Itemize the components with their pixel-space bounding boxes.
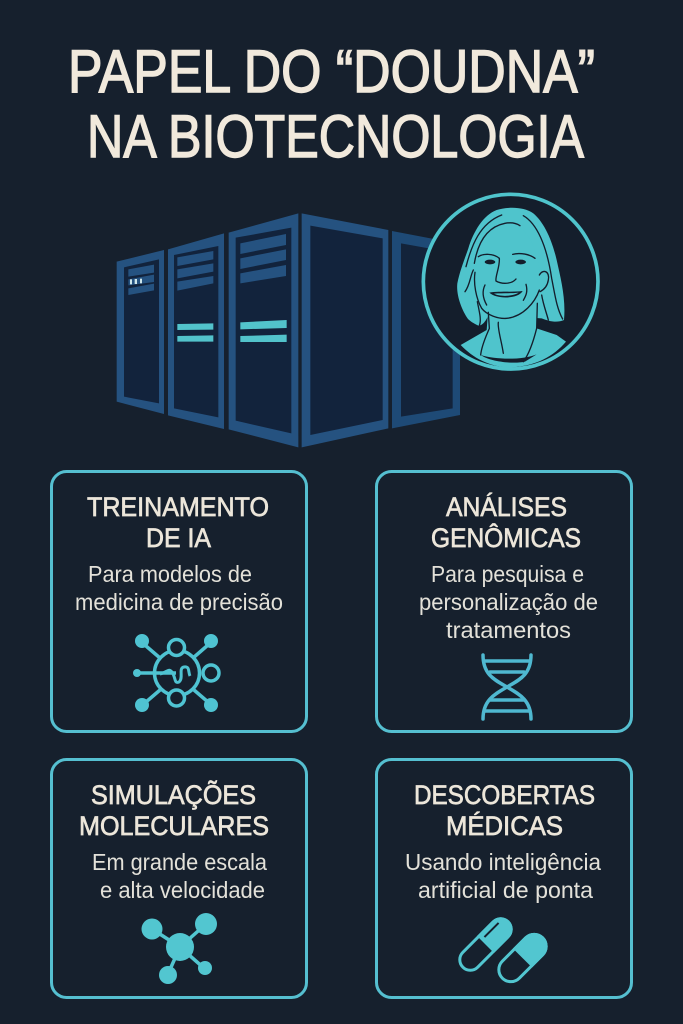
text block: Em grande escala <box>92 849 267 875</box>
heading <box>79 779 269 841</box>
icon: DNA helix <box>483 655 531 719</box>
text block: medicina de precisão <box>75 589 283 615</box>
heading <box>87 492 269 553</box>
hair <box>457 208 564 326</box>
icon: neural network <box>133 634 219 712</box>
text block <box>419 561 598 643</box>
heading <box>431 492 581 553</box>
text block <box>92 849 267 903</box>
heading: TREINAMENTO <box>87 492 269 522</box>
facial lines <box>465 215 563 362</box>
text block <box>75 561 283 615</box>
heading: DESCOBERTAS <box>414 780 595 810</box>
heading <box>414 780 595 841</box>
heading: SIMULAÇÕES <box>91 779 256 810</box>
panel: descobertas médicas <box>376 760 632 998</box>
text block <box>405 849 601 903</box>
text block: Para pesquisa e <box>431 561 584 587</box>
heading: GENÔMICAS <box>431 522 581 553</box>
text block: artificial de ponta <box>418 877 593 903</box>
text block: Usando inteligência <box>405 849 601 875</box>
heading: MÉDICAS <box>446 811 563 841</box>
title: NA BIOTECNOLOGIA <box>87 103 584 170</box>
icon: capsules <box>454 912 553 988</box>
illustration: server racks <box>117 213 460 447</box>
text block: e alta velocidade <box>100 877 265 903</box>
panel: análises genômicas <box>376 472 632 732</box>
icon: molecule <box>142 913 217 984</box>
portrait: Doudna <box>423 194 598 369</box>
text block: tratamentos <box>446 617 571 643</box>
text block: personalização de <box>419 589 598 615</box>
heading: MOLECULARES <box>79 811 269 841</box>
face <box>475 223 540 318</box>
text block: Para modelos de <box>88 561 252 587</box>
panel: treinamento de IA <box>52 472 306 732</box>
panel: simulações moleculares <box>52 760 306 998</box>
shoulders and neck <box>461 302 566 368</box>
heading: DE IA <box>146 523 211 553</box>
title: PAPEL DO “DOUDNA” <box>68 38 595 105</box>
title <box>68 38 595 170</box>
heading: ANÁLISES <box>446 492 567 522</box>
